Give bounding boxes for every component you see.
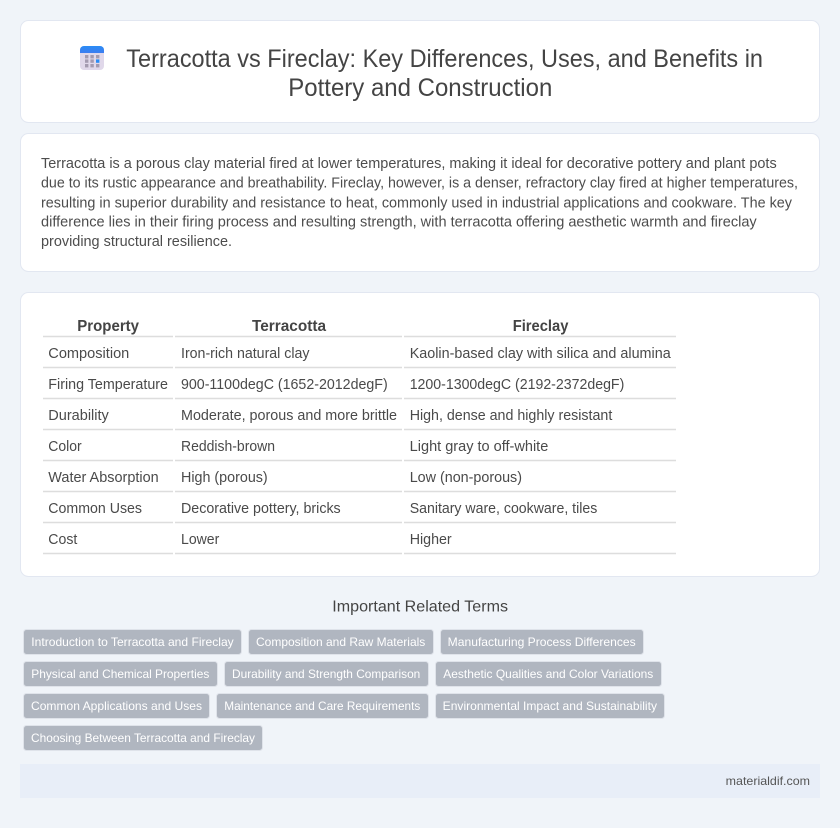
row: common uses: Common Uses [48,501,142,517]
table header row: Terracotta [252,318,326,335]
row: water absorption [48,470,522,486]
tag: environment: Environmental Impact and Sustainability [443,699,657,713]
tag: choosing [24,726,262,750]
row: water absorption: Water Absorption [48,470,159,486]
row: cost: Cost [48,532,77,548]
panel: introduction paragraph [20,134,820,272]
row: firing temperature: 900-1100degC (1652-2012degF) [181,377,388,393]
row: durability: High, dense and highly resistant [410,408,612,424]
table header row: Property [77,318,139,335]
icon: calendar [80,46,104,70]
tag: composition: Composition and Raw Materials [256,635,425,649]
footer [20,764,820,798]
row: color: Reddish-brown [181,439,275,455]
title [126,45,763,102]
row: color: Color [48,439,82,455]
tag: applications [24,694,210,718]
row: cost: Lower [181,532,219,548]
tag: choosing: Choosing Between Terracotta and Fireclay [31,731,255,745]
tag: aesthetics [436,662,662,686]
row: common uses [48,501,597,517]
title: Pottery and Construction [288,74,552,102]
tag: maintenance [216,694,428,718]
tag: durability: Durability and Strength Comparison [232,667,420,681]
row: composition: Iron-rich natural clay [181,346,310,362]
heading: important related terms: Important Related Terms [332,599,508,616]
tag: applications: Common Applications and Uses [31,699,202,713]
row: composition: Composition [48,346,129,362]
tag: aesthetics: Aesthetic Qualities and Color Variations [443,667,653,681]
row: composition: Kaolin-based clay with silica and alumina [410,346,671,362]
table header row [77,318,568,335]
footer: materialdif.com [726,774,810,788]
title: Terracotta vs Fireclay: Key Differences, Uses, and Benefits in [126,45,763,73]
row: durability: Durability [48,408,110,424]
row: water absorption: High (porous) [181,470,268,486]
row: composition [48,346,671,362]
row: durability: Moderate, porous and more brittle [181,408,397,424]
row: common uses: Decorative pottery, bricks [181,501,341,517]
tag: properties [24,662,218,686]
tag: introduction [24,630,242,654]
row: firing temperature [48,377,624,393]
row: firing temperature: Firing Temperature [48,377,168,393]
row: cost: Higher [410,532,452,548]
row: firing temperature: 1200-1300degC (2192-2372degF) [410,377,624,393]
text block: summary: due to its rustic appearance and breathability. Fireclay, however, is a denser, refractory clay fired at higher temperatures, [41,176,798,192]
panel: related term tags [24,630,664,750]
tag: manufacturing: Manufacturing Process Differences [448,635,636,649]
tag: composition [248,630,434,654]
row: color: Light gray to off-white [410,439,548,455]
tag: properties: Physical and Chemical Properties [31,667,209,681]
tag: maintenance: Maintenance and Care Requirements [224,699,420,713]
tag: durability [224,662,428,686]
panel: comparison table [20,292,820,576]
row: cost [48,532,452,548]
table header row: Fireclay [513,318,568,335]
text block: summary: providing structural resilience. [41,234,232,250]
tag: manufacturing [440,630,644,654]
row: water absorption: Low (non-porous) [410,470,522,486]
row: durability [48,408,612,424]
text block: summary: Terracotta is a porous clay material fired at lower temperatures, making it ideal for decorative pottery and plant pots [41,156,777,172]
text block: summary [41,156,798,250]
tag: introduction: Introduction to Terracotta and Fireclay [31,635,234,649]
header panel [20,20,820,122]
row: common uses: Sanitary ware, cookware, tiles [410,501,597,517]
tag: environment [436,694,664,718]
text block: summary: resulting in superior durability and resistance to heat, commonly used in industrial applications and cookware. The key [41,196,793,212]
text block: summary: difference lies in their firing process and resulting strength, with terracotta offering aesthetic warmth and fireclay [41,214,758,230]
row: color [48,439,548,455]
